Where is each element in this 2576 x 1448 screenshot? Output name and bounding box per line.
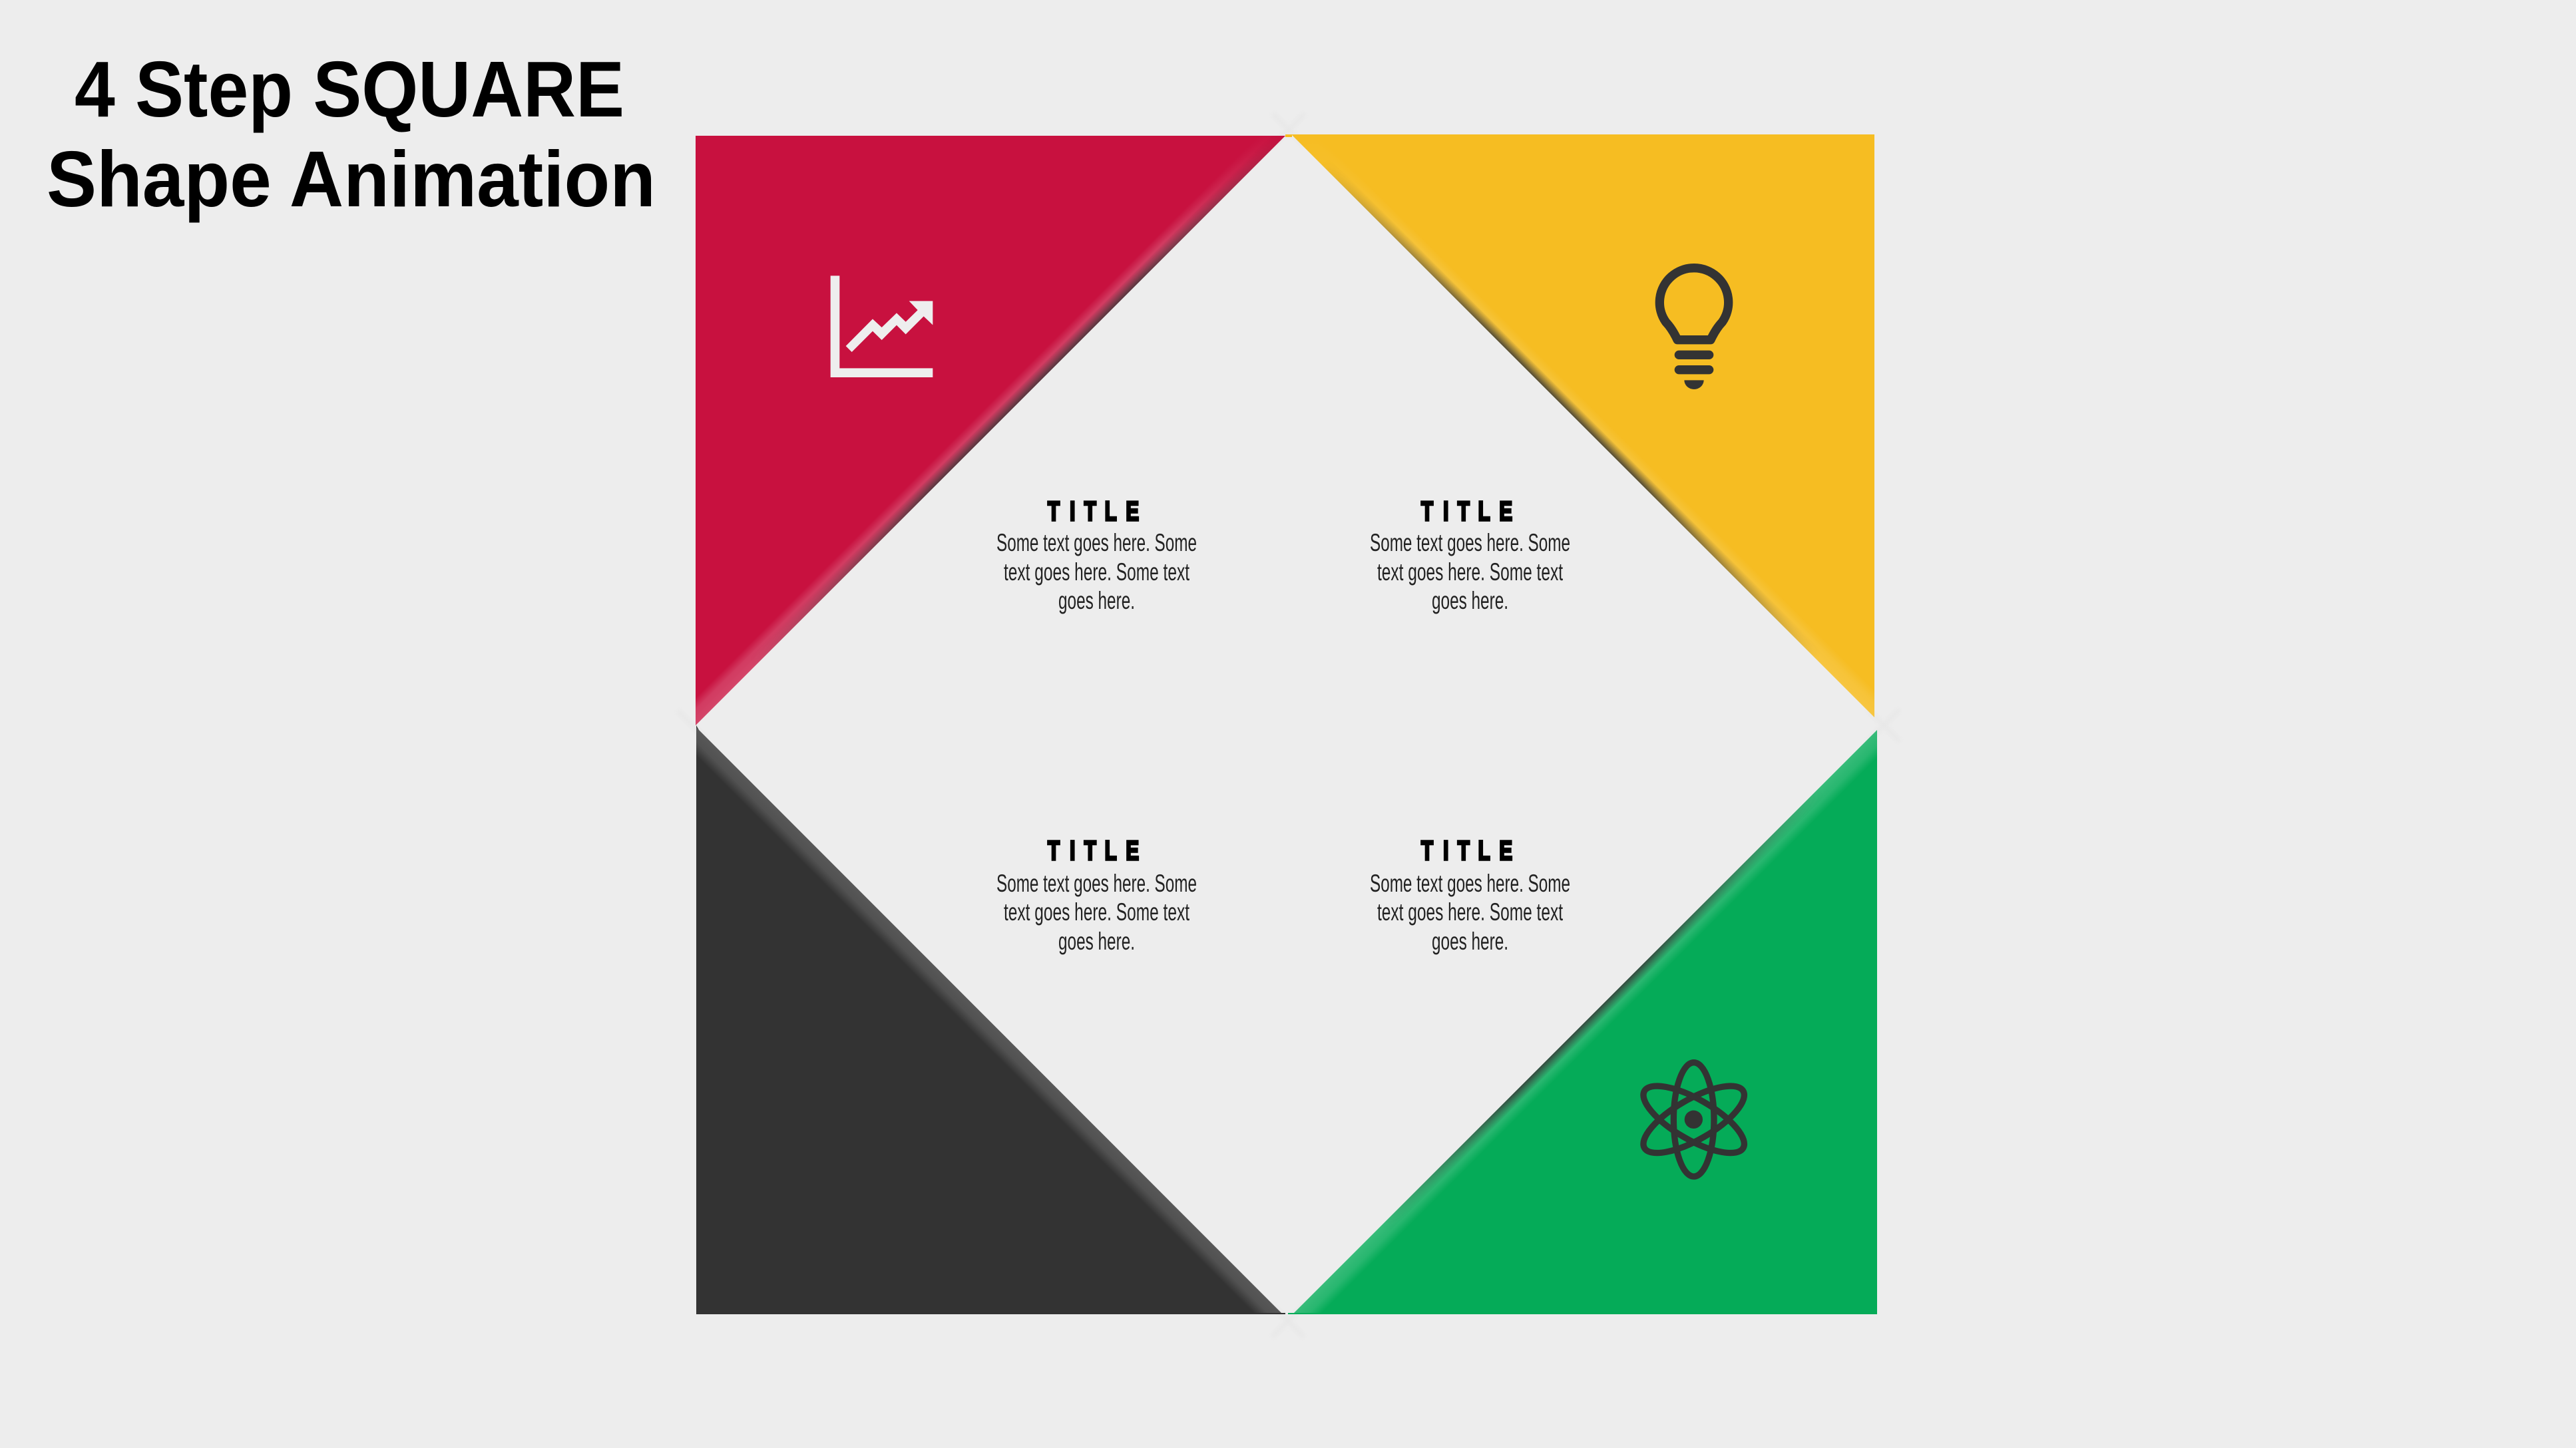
panel: green triangle bbox=[1288, 730, 1877, 1314]
text block: bottom right: goes here. bbox=[1432, 928, 1508, 955]
panel: dark triangle bbox=[696, 725, 1285, 1314]
title: Shape Animation bbox=[47, 135, 656, 224]
icon: growth chart bbox=[831, 275, 933, 377]
text block: bottom left: goes here. bbox=[1058, 928, 1135, 955]
title bbox=[47, 45, 656, 224]
text block: bottom left: TITLE bbox=[1048, 835, 1139, 866]
title: 4 Step SQUARE bbox=[75, 45, 624, 134]
text block: bottom right bbox=[1370, 835, 1570, 955]
text block: bottom right: Some text goes here. Some bbox=[1370, 870, 1570, 897]
text block: top left: Some text goes here. Some bbox=[996, 529, 1197, 556]
text block: bottom left bbox=[996, 835, 1197, 955]
panel: red triangle bbox=[696, 136, 1285, 725]
text block: top right: goes here. bbox=[1432, 587, 1508, 614]
text block: top left: goes here. bbox=[1058, 587, 1135, 614]
text block: bottom left: Some text goes here. Some bbox=[996, 870, 1197, 897]
text block: top right bbox=[1370, 496, 1570, 614]
text block: top left: text goes here. Some text bbox=[1004, 558, 1189, 586]
text block: top right: Some text goes here. Some bbox=[1370, 529, 1570, 556]
text block: top left bbox=[996, 496, 1197, 614]
text block: top right: text goes here. Some text bbox=[1377, 558, 1563, 586]
icon: atom bbox=[1634, 1063, 1753, 1176]
icon: light bulb bbox=[1659, 268, 1729, 389]
panel: faint corner glints bbox=[678, 114, 1900, 1337]
text block: bottom right: TITLE bbox=[1421, 835, 1512, 866]
text block: top left: TITLE bbox=[1048, 496, 1139, 526]
text block: bottom right: text goes here. Some text bbox=[1377, 898, 1563, 926]
text block: bottom left: text goes here. Some text bbox=[1004, 898, 1189, 926]
panel: yellow triangle bbox=[1285, 134, 1874, 717]
text block: top right: TITLE bbox=[1421, 496, 1512, 526]
